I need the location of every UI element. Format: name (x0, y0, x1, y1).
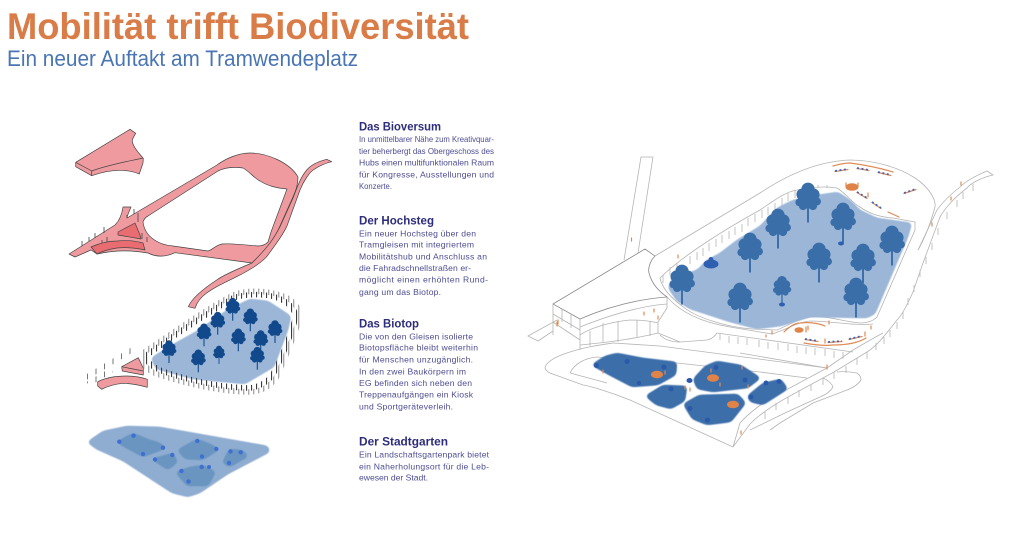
road outlines (545, 160, 993, 447)
text block: Das Biotop: Das Biotop (359, 318, 419, 330)
fence ticks (143, 291, 300, 392)
text block: Das Bioversum: Konzerte. (359, 181, 392, 191)
text block: Das Biotop: EG befinden sich neben den (359, 378, 472, 388)
stilts (85, 350, 132, 384)
text block: Das Bioversum: Hubs einen multifunktionalen Raum (359, 158, 494, 168)
layer: Stadtgarten (87, 426, 270, 497)
plaza furniture: upper (833, 163, 961, 226)
axonometric site plan (528, 157, 993, 447)
text block: Der Hochsteg: Ein neuer Hochsteg über den (359, 229, 476, 239)
text block: Der Hochsteg (359, 215, 488, 297)
pond shrubs (594, 359, 782, 422)
text block: Der Hochsteg: die Fahradschnellstraßen er- (359, 263, 471, 273)
text block: Das Bioversum (359, 122, 494, 191)
text block: Das Biotop: und Sportgeräteverleih. (359, 401, 453, 411)
layer: Hochsteg ring (69, 153, 332, 308)
text block: Das Bioversum: In unmittelbarer Nähe zum Kreativquar- (359, 134, 494, 144)
text column (359, 122, 494, 483)
text block: Der Stadtgarten: Der Stadtgarten (359, 436, 448, 448)
exploded diagram: layers (69, 129, 332, 497)
plaza furniture: lower (784, 321, 871, 345)
title: Mobilität trifft Biodiversität (7, 6, 469, 47)
bridge ramp: s-curve (188, 159, 332, 308)
text block: Das Biotop (359, 318, 478, 411)
text block: Der Hochsteg: Tramgleisen mit integriertem (359, 240, 474, 250)
text block: Der Hochsteg: Mobilitätshub und Anschluss an (359, 251, 487, 261)
entrance pavilions (98, 358, 147, 389)
text block: Das Bioversum: tier beherbergt das Obergeschoss des (359, 146, 494, 156)
text block: Das Biotop: für Menschen unzugänglich. (359, 355, 473, 365)
text block: Der Hochsteg: gang um das Biotop. (359, 287, 441, 297)
layer: Biotop with fence and trees (85, 291, 300, 392)
text block: Der Hochsteg: möglicht einen erhöhten Rund- (359, 275, 488, 285)
biotop surface (151, 299, 291, 384)
text block: Der Stadtgarten: Ein Landschaftsgartenpark bietet (359, 449, 490, 459)
railings (663, 184, 973, 419)
trees (162, 298, 282, 372)
orange pond spots (651, 371, 739, 408)
text block: Der Stadtgarten (359, 436, 490, 483)
text block: Das Biotop: Biotopsfläche bleibt weiterhin (359, 343, 478, 353)
subtitle: Ein neuer Auftakt am Tramwendeplatz (7, 46, 358, 71)
text block: Das Bioversum: für Kongresse, Ausstellungen und (359, 170, 494, 180)
text block: Das Biotop: Treppenaufgängen ein Kiosk (359, 390, 474, 400)
orange figures (557, 238, 827, 434)
biotop surface (668, 192, 912, 329)
text block: Das Biotop: Die von den Gleisen isolierte (359, 331, 473, 341)
text block: Der Stadtgarten: ein Naherholungsort für die Leb- (359, 461, 489, 471)
building: Hub (528, 157, 680, 350)
text block: Das Bioversum: Das Bioversum (359, 122, 441, 134)
bush and water spots (704, 242, 844, 306)
text block: Der Stadtgarten: ewesen der Stadt. (359, 473, 428, 483)
layer: Bioversum roof (76, 129, 143, 176)
Stadtgarten ponds (591, 353, 788, 425)
text block: Der Hochsteg: Der Hochsteg (359, 215, 434, 227)
trees (669, 183, 905, 322)
text block: Das Biotop: In den zwei Baukörpern im (359, 366, 466, 376)
